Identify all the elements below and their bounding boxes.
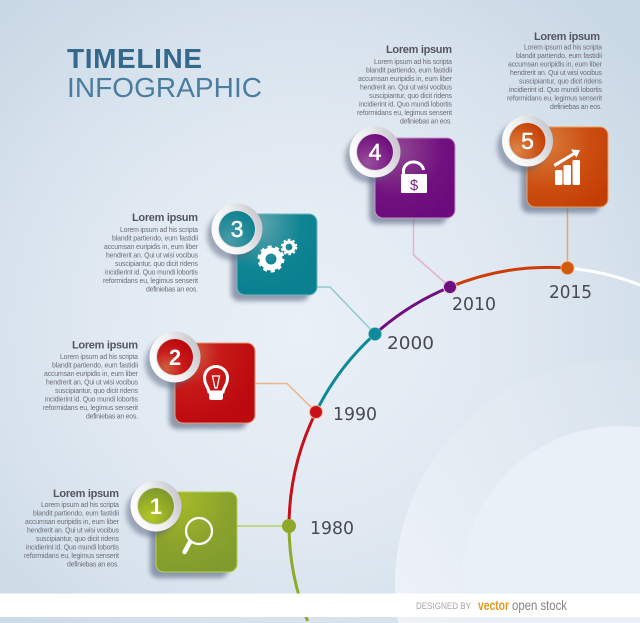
text block 1: suscipiantur, quo dicit ridens: [36, 536, 120, 543]
text block 4: accumsan euripidis in, eum liber: [358, 76, 453, 83]
text block 2: blandit partiendo, eum fastidii: [52, 362, 138, 370]
dot 2015: [561, 262, 574, 274]
year 2000: 2000: [387, 333, 434, 354]
number badge 2: 2: [169, 345, 181, 370]
connector 5: [566, 207, 568, 268]
text block 3: incidierint id. Quo mundi lobortis: [105, 270, 199, 276]
text block 5: accumsan euripidis in, eum liber: [508, 62, 603, 68]
card 2: [145, 332, 255, 429]
text block 1: definiebas an eos.: [67, 562, 119, 568]
connector 2: [255, 384, 316, 412]
text block 5: suscipiantur, quo dicit ridens: [519, 78, 603, 86]
text block 5: Lorem ipsum: [534, 31, 600, 43]
card 1: [126, 480, 237, 578]
text block 2: hendrerit an. Qui ut wisi vocibus: [46, 380, 139, 386]
text block 5: incidierint id. Quo mundi lobortis: [509, 87, 603, 94]
number badge 4: 4: [369, 139, 382, 165]
timeline arc: [289, 267, 640, 621]
text block 2: accumsan euripidis in, eum liber: [44, 371, 139, 378]
text block 2: Lorem ipsum ad his scripta: [60, 354, 138, 361]
background circle: inner: [461, 426, 640, 623]
number badge 1: 1: [150, 494, 162, 519]
text block 3: suscipiantur, quo dicit ridens: [115, 261, 199, 268]
text block 2: suscipiantur, quo dicit ridens: [55, 388, 139, 395]
connector 1: [237, 525, 289, 527]
text block 3: definiebas an eos.: [146, 286, 198, 294]
text block 2: incidierint id. Quo mundi lobortis: [45, 396, 139, 404]
icon: open padlock: $: [410, 177, 419, 194]
year 2015: 2015: [549, 282, 592, 303]
year 1980: 1980: [310, 518, 354, 539]
dot 1990: [310, 406, 322, 418]
icon: gears: [259, 240, 296, 271]
year 2010: 2010: [452, 294, 496, 315]
text block 3: accumsan euripidis in, eum liber: [104, 244, 199, 251]
text block 5: definiebas an eos.: [550, 104, 602, 111]
text block 5: blandit partiendo, eum fastidii: [516, 53, 602, 60]
text block 2: definiebas an eos.: [86, 414, 138, 420]
dot 2010: [444, 280, 456, 294]
text block 3: [103, 212, 199, 294]
footer credit: DESIGNED BY: [416, 601, 472, 612]
text block 1: Lorem ipsum ad his scripta: [41, 502, 119, 509]
text block 1: reformidans eu, legimus senserit: [24, 553, 119, 560]
text block 1: blandit partiendo, eum fastidii: [33, 510, 119, 518]
text block 3: hendrerit an. Qui ut wisi vocibus: [106, 252, 199, 260]
footer strip: [0, 594, 640, 617]
year 1990: 1990: [333, 404, 377, 425]
text block 4: Lorem ipsum: [386, 44, 452, 56]
text block 1: accumsan euripidis in, eum liber: [25, 519, 120, 526]
text block 2: [43, 340, 139, 420]
text block 3: Lorem ipsum: [132, 212, 198, 224]
text block 4: [357, 44, 453, 126]
dot 1980: [282, 519, 296, 533]
icon: light bulb: [204, 366, 228, 400]
text block 3: blandit partiendo, eum fastidii: [112, 236, 198, 242]
text block 5: reformidans eu, legimus senserit: [507, 96, 602, 102]
title: [67, 43, 262, 103]
footer credit: [416, 597, 568, 613]
text block 4: hendrerit an. Qui ut wisi vocibus: [360, 84, 453, 92]
title: TIMELINE: [67, 43, 202, 74]
number badge 3: 3: [231, 216, 243, 242]
text block 4: blandit partiendo, eum fastidii: [366, 68, 452, 74]
footer credit: open stock: [512, 597, 568, 613]
text block 5: hendrerit an. Qui ut wisi vocibus: [510, 70, 603, 77]
icon: magnifier: [184, 518, 212, 552]
text block 5: [507, 31, 603, 111]
dot 2000: [368, 328, 382, 340]
text block 4: definiebas an eos.: [400, 118, 452, 126]
text block 2: Lorem ipsum: [72, 340, 138, 352]
connector 4: [414, 218, 450, 287]
text block 4: incidierint id. Quo mundi lobortis: [359, 102, 453, 108]
text block 1: [24, 488, 120, 568]
text block 4: suscipiantur, quo dicit ridens: [369, 93, 453, 100]
text block 1: hendrerit an. Qui ut wisi vocibus: [27, 528, 120, 534]
footer credit: vector: [478, 597, 509, 613]
text block 4: Lorem ipsum ad his scripta: [374, 59, 452, 66]
background circle: outer: [395, 360, 640, 623]
text block 3: Lorem ipsum ad his scripta: [120, 227, 198, 234]
text block 4: reformidans eu, legimus senserit: [357, 110, 452, 117]
title: INFOGRAPHIC: [67, 72, 262, 103]
card 5: [497, 116, 608, 213]
number badge 5: 5: [521, 128, 534, 154]
text block 1: Lorem ipsum: [53, 488, 119, 500]
text block 3: reformidans eu, legimus senserit: [103, 278, 198, 285]
icon: growth chart: [554, 150, 580, 185]
card 3: [207, 204, 317, 301]
card 4: [345, 126, 455, 224]
text block 1: incidierint id. Quo mundi lobortis: [26, 544, 120, 552]
connector 3: [317, 287, 375, 334]
text block 5: Lorem ipsum ad his scripta: [524, 44, 602, 52]
text block 2: reformidans eu, legimus senserit: [43, 405, 138, 412]
